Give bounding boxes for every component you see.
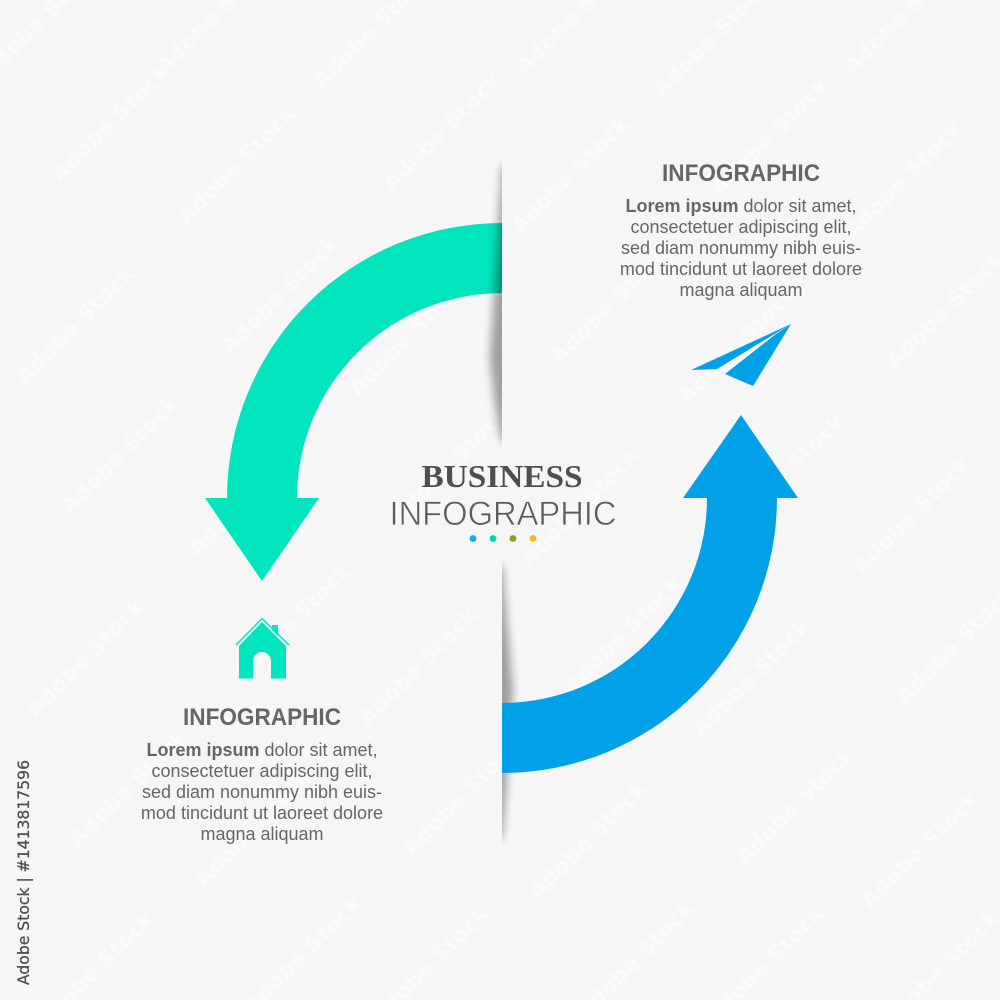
fold shadow: upper — [484, 162, 502, 446]
watermark pattern: Adobe Stock — [56, 391, 184, 519]
watermark pattern: Adobe Stock — [687, 614, 815, 742]
top-right body copy: magna aliquam — [679, 280, 803, 300]
watermark pattern: Adobe Stock — [848, 451, 976, 579]
center title — [390, 458, 616, 533]
watermark pattern: Adobe Stock — [21, 594, 149, 722]
watermark pattern: Adobe Stock — [839, 116, 967, 244]
top-right heading: INFOGRAPHIC — [662, 160, 820, 187]
infographic canvas — [16, 162, 862, 985]
watermark pattern: Adobe Stock — [173, 101, 301, 229]
watermark pattern: Adobe Stock — [344, 273, 472, 401]
watermark pattern: Adobe Stock — [856, 786, 984, 914]
green arrow — [205, 223, 502, 581]
top-right body copy: Lorem ipsum dolor sit amet, — [625, 196, 857, 216]
watermark pattern: Adobe Stock — [11, 261, 139, 389]
bottom-left text block — [141, 704, 383, 844]
watermark pattern: Adobe Stock — [190, 764, 318, 892]
watermark pattern: Adobe Stock — [46, 59, 174, 187]
top-right body copy: sed diam nonummy nibh euis- — [621, 238, 861, 258]
subtitle: infographic: INFOGRAPHIC — [390, 495, 616, 533]
bottom-left body copy: magna aliquam — [200, 824, 324, 844]
top-right body copy: consectetuer adipiscing elit, — [630, 217, 852, 237]
watermark pattern: Adobe Stock — [558, 571, 686, 699]
watermark pattern: Adobe Stock — [546, 241, 674, 369]
bottom-left body copy: mod tincidunt ut laoreet dolore — [141, 803, 383, 823]
watermark pattern: Adobe Stock — [354, 603, 482, 731]
bottom-left body copy — [141, 740, 383, 844]
top-right text block — [620, 160, 862, 300]
watermark pattern: Adobe Stock — [706, 73, 834, 201]
fold shadow: lower — [502, 562, 518, 842]
watermark pattern: Adobe Stock — [524, 776, 652, 904]
watermark pattern: Adobe Stock — [398, 733, 526, 861]
watermark pattern: Adobe Stock — [228, 558, 356, 686]
bottom-left heading: INFOGRAPHIC — [183, 704, 341, 731]
watermark pattern: Adobe Stock — [386, 401, 514, 529]
colored dots — [470, 535, 536, 542]
watermark pattern: Adobe Stock — [516, 443, 644, 571]
watermark pattern: Adobe Stock — [64, 724, 192, 852]
stock id side label: Adobe Stock | #1413817596 — [14, 760, 33, 985]
watermark pattern: Adobe Stock — [721, 409, 849, 537]
blue arrow — [502, 415, 798, 773]
watermark pattern: Adobe Stock — [881, 246, 1000, 374]
watermark pattern: Adobe Stock — [183, 433, 311, 561]
watermark pattern: Adobe Stock — [216, 231, 344, 359]
icon: house — [236, 618, 289, 678]
bottom-left body copy: sed diam nonummy nibh euis- — [142, 782, 382, 802]
top-right body copy: mod tincidunt ut laoreet dolore — [620, 259, 862, 279]
icon: paper plane — [691, 324, 791, 386]
bottom-left body copy: consectetuer adipiscing elit, — [151, 761, 373, 781]
watermark pattern: Adobe Stock — [731, 742, 859, 870]
watermark pattern: Adobe Stock — [378, 68, 506, 196]
watermark pattern: Adobe Stock — [506, 111, 634, 239]
title: business: BUSINESS — [422, 458, 582, 494]
bottom-left body copy: Lorem ipsum dolor sit amet, — [146, 740, 378, 760]
watermark pattern: Adobe Stock — [674, 281, 802, 409]
top-right body copy — [620, 196, 862, 300]
